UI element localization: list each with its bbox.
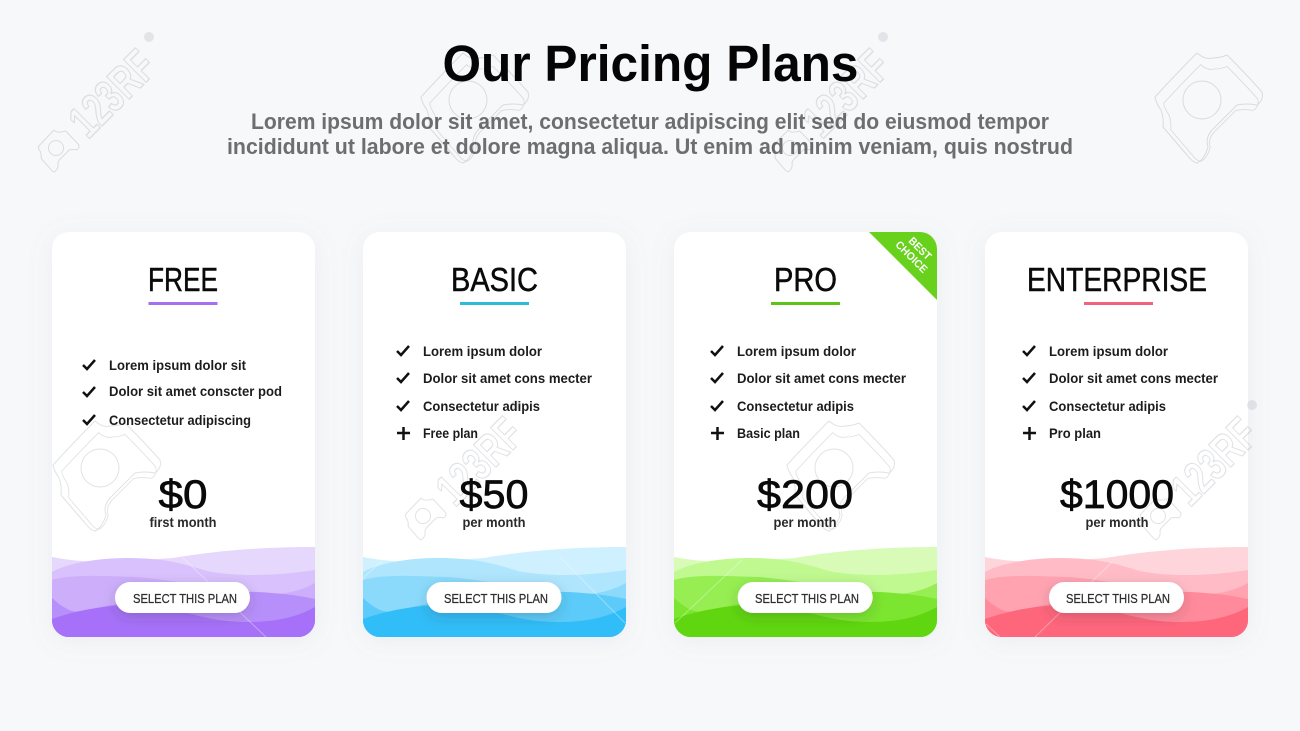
- wave background: [985, 547, 1248, 637]
- feature list: Dolor sit amet cons mecter: [423, 370, 593, 386]
- feature list: Consectetur adipis: [1049, 398, 1166, 414]
- underline: [148, 302, 218, 305]
- feature list: Consectetur adipiscing: [109, 412, 251, 428]
- subtitle: Lorem ipsum dolor sit amet, consectetur adipiscing elit sed do eiusmod tempor: [251, 109, 1049, 134]
- button: SELECT THIS PLAN: [755, 591, 859, 606]
- feature list: Lorem ipsum dolor: [423, 343, 543, 359]
- best choice ribbon: [869, 231, 938, 300]
- price period: per month: [1086, 515, 1148, 530]
- watermark: stock logo repeats: 123RF: [792, 40, 900, 147]
- watermark: stock logo repeats: 123RF: [425, 408, 533, 515]
- button: [115, 582, 250, 613]
- feature list: Dolor sit amet cons mecter: [737, 370, 907, 386]
- plan name: ENTERPRISE: [1027, 261, 1207, 298]
- plan name: BASIC: [451, 261, 538, 298]
- feature list: Dolor sit amet conscter pod: [109, 383, 282, 399]
- underline: [771, 302, 840, 305]
- feature list: [83, 357, 282, 428]
- button: SELECT THIS PLAN: [444, 591, 548, 606]
- button: [1049, 582, 1184, 613]
- feature list: [397, 343, 593, 441]
- wave background: [52, 547, 315, 638]
- price period: first month: [150, 515, 216, 530]
- price: $50: [460, 473, 528, 517]
- feature list: [1023, 343, 1219, 441]
- price period: per month: [774, 515, 836, 530]
- plan name: PRO: [774, 261, 837, 298]
- feature list: Free plan: [423, 425, 478, 441]
- feature list: Dolor sit amet cons mecter: [1049, 370, 1219, 386]
- watermark: stock logo repeats: [38, 32, 1268, 540]
- price period: per month: [462, 515, 526, 530]
- price: $0: [158, 473, 208, 517]
- button: SELECT THIS PLAN: [133, 591, 237, 606]
- button: [426, 582, 562, 613]
- underline: [1084, 302, 1153, 305]
- button: [738, 582, 873, 613]
- feature list: Consectetur adipis: [737, 398, 854, 414]
- feature list: Consectetur adipis: [423, 398, 540, 414]
- feature list: [711, 343, 907, 441]
- panel: enterprise plan: [985, 232, 1248, 637]
- panel: free plan: [52, 232, 315, 638]
- wave background: [674, 547, 937, 637]
- watermark: stock logo repeats: 123RF: [58, 40, 166, 147]
- price: $1000: [1060, 473, 1174, 517]
- subtitle: [227, 109, 1073, 159]
- best choice ribbon: BEST: [906, 235, 934, 263]
- title: Our Pricing Plans: [442, 35, 858, 92]
- underline: [460, 302, 529, 305]
- price: $200: [757, 473, 853, 517]
- panel: basic plan: [363, 232, 626, 637]
- feature list: Pro plan: [1049, 425, 1101, 441]
- feature list: Lorem ipsum dolor: [737, 343, 857, 359]
- button: SELECT THIS PLAN: [1066, 591, 1170, 606]
- wave background: [363, 547, 626, 637]
- panel: pro plan: [674, 231, 938, 637]
- feature list: Lorem ipsum dolor sit: [109, 357, 246, 373]
- best choice ribbon: CHOICE: [893, 239, 929, 276]
- feature list: Lorem ipsum dolor: [1049, 343, 1169, 359]
- feature list: Basic plan: [737, 425, 800, 441]
- subtitle: incididunt ut labore et dolore magna aliqua. Ut enim ad minim veniam, quis nostrud: [227, 134, 1073, 159]
- plan name: FREE: [148, 261, 218, 298]
- watermark: stock logo repeats: 123RF: [1160, 408, 1268, 515]
